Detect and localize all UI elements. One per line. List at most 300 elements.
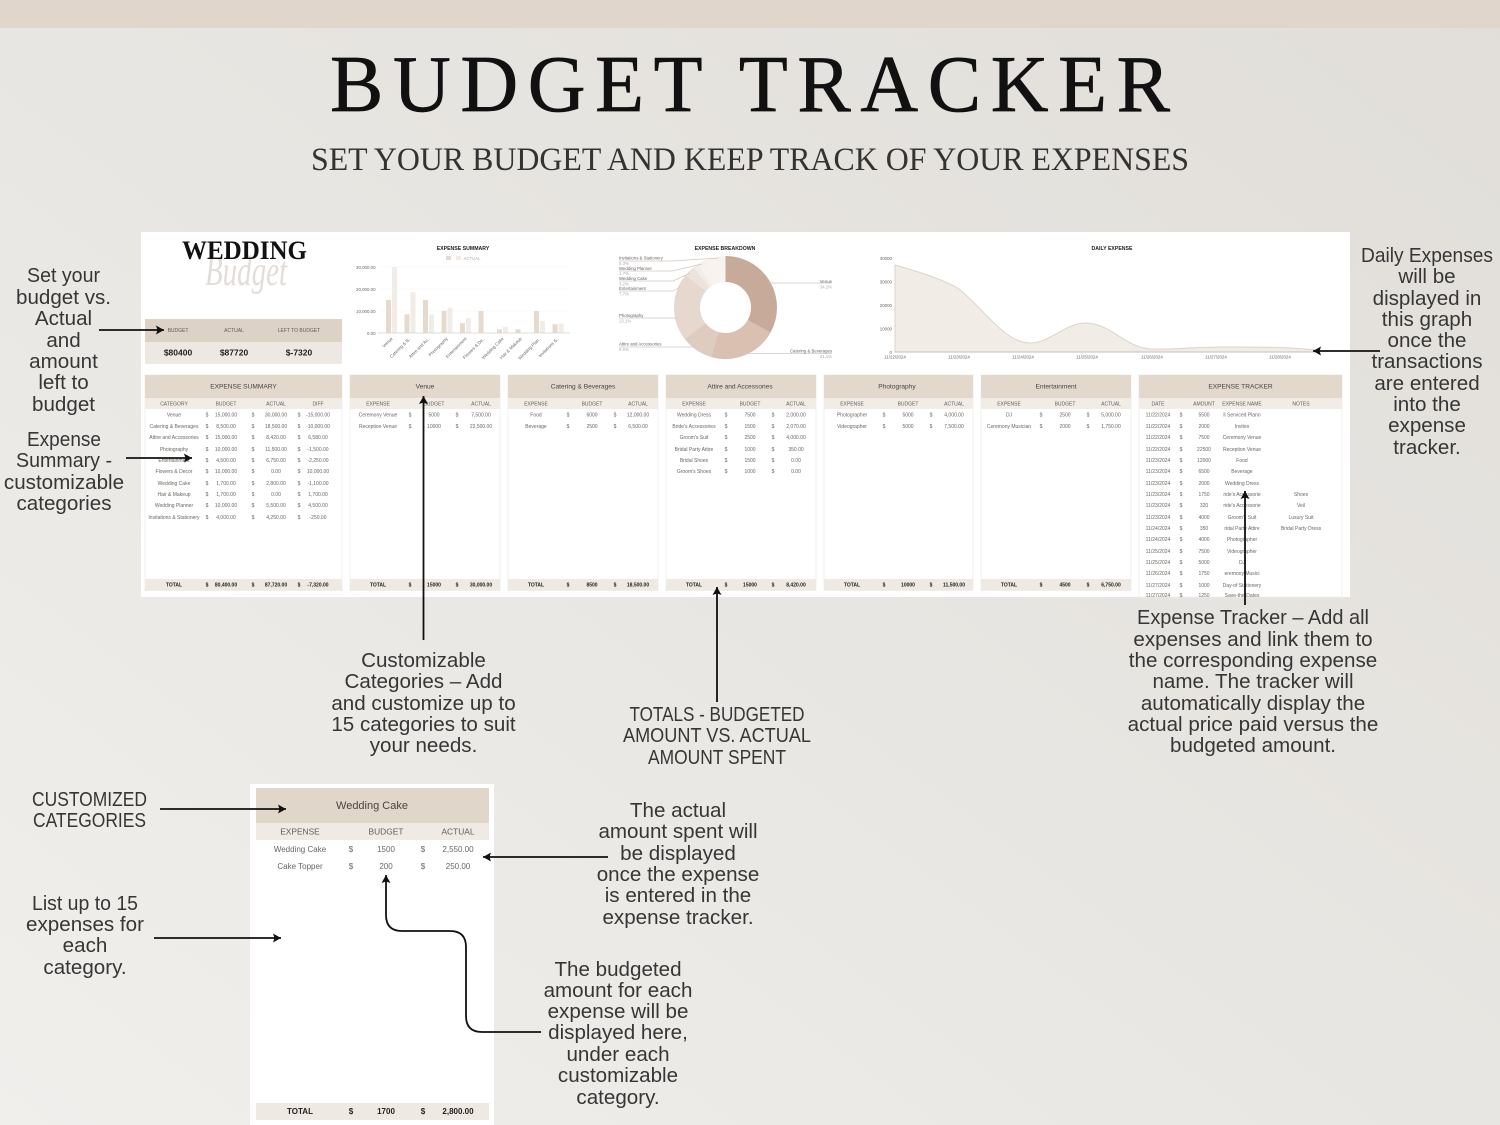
panel: wedding cake detail: 250.00 [446,862,471,871]
table: expense summary: $ [252,492,255,498]
table: venue: 15000 [427,582,441,588]
table: expense tracker: 4000 [1198,515,1210,521]
table: photography [824,375,973,590]
table: expense tracker: 22500 [1197,447,1211,453]
table: expense tracker: 11/23/2024 [1146,469,1171,475]
panel: wedding cake detail: Wedding Cake [274,845,327,854]
table: expense tracker: 1250 [1198,593,1210,599]
donut chart: expense breakdown: 34.2% [820,284,832,290]
table: expense summary: $ [298,582,301,588]
bar chart: expense summary: Wedding Plan.. [517,336,542,361]
table: expense summary: $ [298,447,301,453]
top band [0,0,1500,28]
area chart: daily expense: 40000 [880,256,893,261]
table: venue: BUDGET [424,402,444,408]
table: catering and beverages: $ [567,582,570,588]
table: venue: $ [456,582,459,588]
table: entertainment: 1,750.00 [1101,424,1121,430]
table: expense summary: $ [298,503,301,509]
table: expense tracker: 1750 [1198,492,1210,498]
table: photography: 10000 [901,582,915,588]
table: expense tracker: $ [1180,583,1183,589]
table: expense summary: Wedding Planner [155,503,193,509]
table: photography: $ [883,582,886,588]
table: attire and accessories: $ [725,412,728,418]
table: expense summary: 6,580.00 [308,435,328,441]
table: expense tracker: 11/24/2024 [1146,537,1171,543]
callout: customizable categories: and customize up to [331,692,516,715]
table: attire and accessories: Bridal Party Attire [675,447,714,453]
spreadsheet dashboard [141,232,1350,599]
table: venue: 30,000.00 [470,582,492,588]
table: expense tracker: $ [1180,537,1183,543]
table: expense summary: TOTAL [166,582,182,588]
callout: daily expenses: expense [1388,414,1466,437]
table: venue: 7,500.00 [471,412,491,418]
callout: daily expenses: into the [1393,393,1461,416]
table: expense tracker: 11/27/2024 [1146,583,1171,589]
bar chart: expense summary: Wedding Cake [481,336,505,360]
callout: customizable categories: your needs. [370,734,477,757]
bar chart: expense summary: 20,000.00 [356,287,376,292]
table: expense summary: -15,000.00 [306,412,330,418]
table: expense tracker: $ [1180,447,1183,453]
table: attire and accessories: $ [725,424,728,430]
bar chart: expense summary: Photography [428,336,449,357]
table: catering and beverages: $ [567,424,570,430]
table: expense summary: $ [206,492,209,498]
table: expense tracker: ride's Accessorie [1223,503,1261,509]
table: catering and beverages: Food [530,412,542,418]
panel: wedding cake detail [250,784,494,1125]
arrow: to expense summary [126,457,192,459]
table: expense tracker: Luxury Suit [1288,515,1314,521]
table: expense tracker: $ [1180,481,1183,487]
table: expense summary: $ [206,458,209,464]
callout: set your budget: Set your [27,264,100,287]
table: expense tracker: eremony Musici [1224,571,1260,577]
table: expense summary: $ [206,412,209,418]
table: attire and accessories: $ [725,469,728,475]
panel: wedding cake detail: 1700 [377,1107,395,1116]
table: attire and accessories: Attire and Accessories [707,384,773,390]
table: catering and beverages: $ [614,424,617,430]
callout: expense tracker: expenses and link them to [1133,628,1373,651]
callout: expense tracker: budgeted amount. [1170,734,1336,757]
table: attire and accessories [666,375,816,590]
panel: wedding cake detail: $ [349,845,354,854]
callout: customizable categories: Categories – Add [344,670,502,693]
table: expense tracker: 11/27/2024 [1146,593,1171,599]
callout: actual amount spent: The actual [630,799,726,822]
table: expense tracker: Beverage [1231,469,1253,475]
table: expense summary: Attire and Accessories [149,435,199,441]
table: expense tracker: $ [1180,469,1183,475]
table: expense summary: BUDGET [216,402,236,408]
table: expense summary: 8,420.00 [266,435,286,441]
arrow: to totals row [716,587,718,702]
table: expense summary: $ [206,424,209,430]
panel: wedding cake detail: 200 [379,862,393,871]
bar chart: expense summary: Flowers & De.. [462,336,486,360]
table: venue: 10000 [427,424,441,430]
table: venue: 5000 [428,412,440,418]
table: photography: $ [930,412,933,418]
table: entertainment: $ [1040,412,1043,418]
table: expense tracker: Invites [1235,424,1250,430]
table: expense summary: $ [206,435,209,441]
table: attire and accessories: $ [772,582,775,588]
table: photography: 7,500.00 [944,424,964,430]
table: expense summary: ACTUAL [266,402,286,408]
table: expense summary: 80,400.00 [215,582,237,588]
table: expense summary: 10,000.00 [215,503,237,509]
table: photography: 5000 [902,412,914,418]
table: expense summary: Entertainment [158,458,190,464]
callout: customizable categories: Customizable [361,649,486,672]
table: expense tracker: Videographer [1227,549,1257,555]
table: expense summary: EXPENSE SUMMARY [210,384,277,390]
table: expense summary: -1,100.00 [307,481,329,487]
table: expense tracker: 11/23/2024 [1146,481,1171,487]
table: catering and beverages: BUDGET [582,402,602,408]
table: expense summary: 11,500.00 [265,447,287,453]
table: expense tracker: 5000 [1198,560,1210,566]
table: expense tracker: 11/24/2024 [1146,526,1171,532]
table: expense summary: 2,800.00 [266,481,286,487]
table: attire and accessories: $ [725,435,728,441]
table: attire and accessories: 7500 [744,412,756,418]
table: expense tracker: Photographer [1227,537,1257,543]
table: attire and accessories: $ [772,458,775,464]
table: expense summary: $ [298,424,301,430]
area chart: daily expense [880,246,1315,360]
table: attire and accessories: 1500 [744,424,756,430]
table: attire and accessories: 2,070.00 [786,424,806,430]
table: expense tracker: Wedding Dress [1225,481,1260,487]
callout: expense summary: categories [16,492,112,515]
area chart: daily expense: 11/23/2024 [948,354,970,360]
table: expense tracker: $ [1180,549,1183,555]
table: catering and beverages: ACTUAL [628,402,648,408]
table: expense tracker: Groom's Suit [1228,515,1257,521]
callout: expense tracker: actual price paid versus the [1128,713,1378,736]
table: expense summary: 4,500.00 [308,503,328,509]
arrow: to venue header [422,396,424,640]
table: expense summary: Hair & Makeup [157,492,191,498]
table: expense summary: $ [252,412,255,418]
table: expense tracker: Save-the-Dates [1225,593,1260,599]
budget totals box: BUDGET [168,328,188,334]
callout: actual amount spent: is entered in the [605,884,751,907]
table: attire and accessories: 8,420.00 [786,582,806,588]
table: photography: 11,500.00 [943,582,965,588]
table: expense tracker: 4000 [1198,537,1210,543]
callout: totals: AMOUNT VS. ACTUAL [623,724,811,747]
table: expense summary: CATEGORY [160,402,188,408]
table: expense tracker: 2000 [1198,481,1210,487]
table: expense summary: 8,500.00 [216,424,236,430]
table: venue: ACTUAL [471,402,491,408]
bar chart: expense summary: Hair & Makeup [499,336,523,360]
table: expense tracker: 2000 [1198,424,1210,430]
table: attire and accessories: TOTAL [686,582,702,588]
callout: set your budget: Actual [35,307,92,330]
callout: daily expenses: displayed in [1373,287,1481,310]
table: expense tracker: 7500 [1198,435,1210,441]
table: entertainment: 2000 [1059,424,1071,430]
area chart: daily expense: 30000 [880,280,893,284]
callout: budgeted amount: The budgeted [554,958,682,981]
table: expense summary: -10,000.00 [306,424,330,430]
panel: wedding cake detail: Cake Topper [277,862,323,871]
donut chart: expense breakdown: Photography [619,313,644,318]
table: attire and accessories: EXPENSE [682,402,706,408]
table: catering and beverages: Beverage [525,424,547,430]
table: expense summary: Catering & Beverages [150,424,199,430]
table: expense tracker: $ [1180,412,1183,418]
table: expense tracker: 12000 [1197,458,1211,464]
area chart: daily expense: 10000 [880,326,893,332]
table: entertainment: $ [1087,424,1090,430]
table: attire and accessories: Bridal Shoes [680,458,709,464]
callout: budgeted amount: category. [576,1086,660,1109]
callout: expense tracker: the corresponding expense [1129,649,1377,672]
table: expense tracker: DJ [1239,560,1246,566]
panel: wedding cake detail: $ [421,1107,426,1116]
table: expense tracker: EXPENSE TRACKER [1208,384,1273,390]
table: expense summary: $ [298,492,301,498]
table: attire and accessories: 1000 [744,469,756,475]
table: expense tracker: Veil [1297,503,1305,509]
table: entertainment: ACTUAL [1101,402,1121,408]
table: attire and accessories: ACTUAL [786,402,806,408]
donut chart: expense breakdown: 9.6% [619,347,629,352]
donut chart: expense breakdown: 13.1% [619,318,631,324]
table: venue: $ [456,424,459,430]
table: catering and beverages: TOTAL [528,582,544,588]
callout: daily expenses: this graph [1382,308,1472,331]
table: expense summary: 10,000.00 [215,447,237,453]
table: venue: Ceremony Venue [359,412,398,418]
table: catering and beverages: $ [567,412,570,418]
table: expense summary: Wedding Cake [158,481,191,487]
area chart: daily expense: 11/28/2024 [1269,354,1291,360]
callout: list up to 15 expenses: each [63,934,107,957]
table: expense tracker: Food [1236,458,1248,464]
table: catering and beverages: 8500 [586,582,598,588]
callout: actual amount spent: once the expense [597,863,759,886]
table: entertainment: Ceremony Musician [987,424,1031,430]
table: photography: 4,000.00 [944,412,964,418]
logo: wedding budget: Budget [205,249,288,295]
callout: totals: TOTALS - BUDGETED [630,703,804,726]
table: expense summary: 5,500.00 [266,503,286,509]
table: expense summary: 0.00 [271,492,281,498]
table: expense tracker [1139,375,1342,599]
table: expense tracker: 5500 [1198,412,1210,418]
table: expense summary: Flowers & Decor [156,469,193,475]
table: attire and accessories: 15000 [743,582,757,588]
donut chart: expense breakdown: Catering & Beverages [790,348,832,354]
table: expense summary: $ [252,447,255,453]
table: expense summary: $ [298,458,301,464]
bar chart: expense summary [356,246,570,361]
donut chart: expense breakdown: 5.3% [619,261,629,266]
table: expense tracker: $ [1180,526,1183,532]
donut chart: expense breakdown: Entertainment [619,286,647,291]
panel: wedding cake detail: $ [421,862,426,871]
table: expense summary: $ [206,469,209,475]
bar chart: expense summary: Invitations &.. [538,336,560,358]
callout: totals: AMOUNT SPENT [648,746,786,769]
table: expense summary: 10,000.00 [307,469,329,475]
title: BUDGET TRACKER [330,41,1171,129]
table: entertainment: TOTAL [1001,582,1017,588]
table: expense summary: Invitations & Stationery [148,515,200,521]
table: attire and accessories: 4,000.00 [786,435,806,441]
table: photography: BUDGET [898,402,918,408]
table: catering and beverages [508,375,658,590]
table: expense tracker: DATE [1152,402,1165,408]
callout: daily expenses: Daily Expenses [1361,244,1493,267]
table: expense tracker: 11/22/2024 [1146,435,1171,441]
table: expense summary: $ [298,435,301,441]
callout: daily expenses: tracker. [1393,436,1461,459]
table: photography: EXPENSE [840,402,864,408]
table: expense tracker: 11/23/2024 [1146,503,1171,509]
table: expense tracker: 1750 [1198,571,1210,577]
table: entertainment: $ [1040,424,1043,430]
table: photography: $ [883,424,886,430]
donut chart: expense breakdown [619,246,833,362]
panel: wedding cake detail: ACTUAL [441,826,475,836]
table: expense tracker: $ [1180,503,1183,509]
table: expense tracker: $ [1180,560,1183,566]
callout: expense summary: customizable [4,471,124,494]
arrow: to category header [160,808,286,810]
area chart: daily expense: 11/24/2024 [1012,354,1034,360]
table: expense tracker: 11/26/2024 [1146,571,1171,577]
table: expense tracker: Reception Venue [1223,447,1261,453]
table: catering and beverages: 2500 [586,424,598,430]
arrow: to budget column [386,875,541,1032]
table: expense summary: $ [206,582,209,588]
table: venue: $ [409,582,412,588]
table: expense tracker: 1000 [1198,583,1210,589]
callout: daily expenses: will be [1397,265,1456,288]
table: expense summary: $ [252,515,255,521]
bar chart: expense summary: Attire and Ac.. [408,336,431,359]
callout: budgeted amount: amount for each [544,979,692,1002]
budget totals box: ACTUAL [224,328,244,334]
table: expense summary: $ [252,469,255,475]
table: attire and accessories: 2500 [744,435,756,441]
table: photography: TOTAL [844,582,860,588]
table: expense tracker: $ [1180,593,1183,599]
budget totals box: LEFT TO BUDGET [278,328,320,334]
callout: actual amount spent: expense tracker. [602,906,754,929]
table: expense tracker: 320 [1200,503,1208,509]
table: catering and beverages: 6000 [586,412,598,418]
table: photography: Photography [878,384,916,390]
callout: customized categories: CATEGORIES [33,809,146,832]
table: expense summary: 87,720.00 [265,582,287,588]
table: expense summary: $ [252,458,255,464]
callout: list up to 15 expenses: category. [43,956,127,979]
table: expense tracker: ridal Party Attire [1224,526,1260,532]
table: expense summary: 18,500.00 [265,424,287,430]
table: expense summary: 1,700.00 [216,492,236,498]
table: entertainment: EXPENSE [997,402,1021,408]
panel: wedding cake detail: 2,550.00 [442,845,474,854]
table: venue: TOTAL [370,582,386,588]
table: expense summary: $ [206,447,209,453]
panel: wedding cake detail: 2,800.00 [442,1107,474,1116]
table: entertainment: $ [1087,582,1090,588]
table: photography: $ [930,582,933,588]
table: expense tracker: $ [1180,515,1183,521]
callout: set your budget: budget vs. [16,286,111,309]
table: venue: Reception Venue [359,424,397,430]
table: entertainment: 5,000.00 [1101,412,1121,418]
table: attire and accessories: 1500 [744,458,756,464]
table: catering and beverages: EXPENSE [524,402,548,408]
table: catering and beverages: 12,000.00 [627,412,649,418]
callout: budgeted amount: under each [566,1043,670,1066]
callout: budgeted amount: expense will be [548,1000,688,1023]
table: expense summary: Photography [160,447,189,453]
table: expense summary: 4,500.00 [216,458,236,464]
callout: daily expenses: are entered [1374,372,1480,395]
bar chart: expense summary: 30,000.00 [356,265,376,270]
arrow: to budget box [99,329,164,331]
donut chart: expense breakdown: Wedding Planner [619,266,652,271]
table: expense tracker: 11/22/2024 [1146,424,1171,430]
callout: list up to 15 expenses: expenses for [26,913,144,936]
table: attire and accessories: $ [772,447,775,453]
table: expense tracker: $ [1180,571,1183,577]
table: expense summary: 0.00 [271,469,281,475]
panel: wedding cake detail: Wedding Cake [336,800,408,812]
table: expense summary: Venue [167,412,181,418]
table: venue: 22,500.00 [470,424,492,430]
panel: wedding cake detail: $ [349,1107,354,1116]
area chart: daily expense: 11/27/2024 [1205,354,1227,360]
table: attire and accessories: Wedding Dress [677,412,712,418]
table: attire and accessories: Bride's Accessories [672,424,716,430]
table: expense summary: $ [298,481,301,487]
bar chart: expense summary: Catering & B.. [389,336,412,359]
budget totals box: $-7320 [286,348,313,358]
table: expense tracker: 350 [1200,526,1208,532]
area chart: daily expense: 11/26/2024 [1141,354,1163,360]
table: expense summary: $ [252,503,255,509]
area chart: daily expense: 0 [890,350,893,355]
bar chart: expense summary: 0.00 [367,331,376,336]
callout: daily expenses: transactions [1371,350,1483,373]
table: expense summary: $ [298,515,301,521]
callout: set your budget: budget [32,393,95,416]
table: entertainment: Entertainment [1035,384,1077,390]
table: expense tracker: ride's Accessorie [1223,492,1261,498]
table: attire and accessories: Groom's Suit [680,435,709,441]
table: entertainment: $ [1040,582,1043,588]
table: photography: 5000 [902,424,914,430]
table: expense tracker: 11/22/2024 [1146,412,1171,418]
callout: actual amount spent: be displayed [620,842,736,865]
table: attire and accessories: $ [772,469,775,475]
